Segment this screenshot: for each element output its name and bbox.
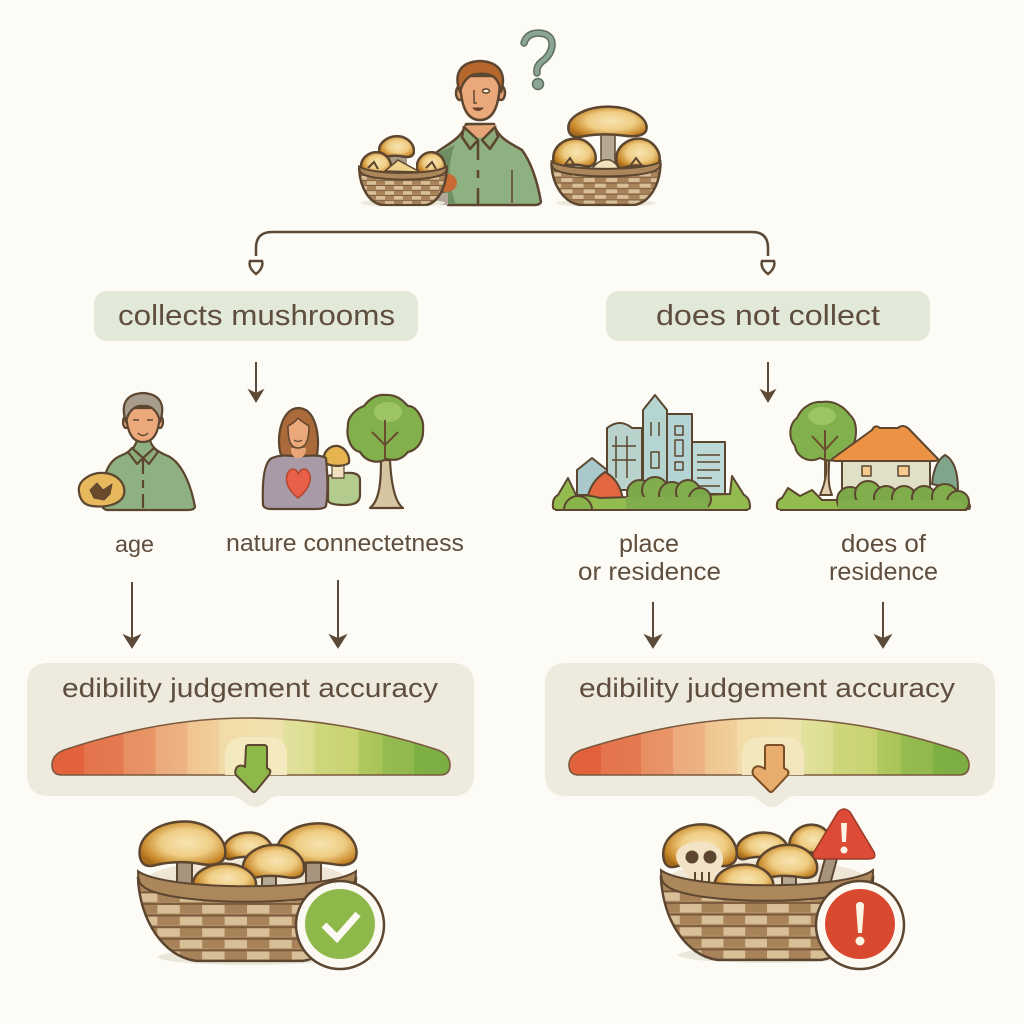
arrow: place of residence to accuracy [646, 602, 660, 647]
small basket of mushrooms [359, 136, 447, 207]
icon: city buildings [553, 395, 750, 524]
label: place or residence: or residence [578, 558, 721, 586]
large basket of mushrooms [552, 107, 660, 207]
gauge marker: green arrow [235, 745, 270, 792]
right branch node [762, 261, 774, 274]
label: does of residence: does of [841, 530, 926, 558]
bushes and ground [777, 481, 970, 513]
pill: does not collect: does not collect [656, 300, 880, 332]
branching connector [250, 232, 774, 274]
skull [676, 842, 723, 884]
pill: collects mushrooms: collects mushrooms [118, 300, 395, 332]
badge: red exclamation [816, 881, 904, 969]
left branch node [250, 261, 262, 274]
arrow: does not collect to factors [762, 362, 774, 401]
basket: edible mushrooms with check [138, 821, 384, 969]
gauge bar [52, 718, 450, 775]
icon: country house with tree [777, 402, 970, 513]
arrow: age to accuracy [125, 582, 139, 647]
warning triangle [813, 809, 875, 859]
panel: accuracy, non-collectors [545, 663, 995, 807]
pill: does not collect [606, 291, 930, 341]
label: does of residence [829, 530, 938, 586]
icon: older man holding mushroom [79, 393, 195, 510]
question mark [524, 33, 552, 90]
pill: collects mushrooms [94, 291, 418, 341]
heading: edibility judgement accuracy: edibility judgement accuracy [62, 673, 439, 703]
label: place or residence: place [619, 530, 679, 558]
label: nature connectetness: nature connectetness [226, 530, 464, 557]
arrow: does of residence to accuracy [876, 602, 890, 647]
gauge marker: orange arrow [752, 745, 788, 792]
top figure: person choosing between baskets [359, 33, 660, 207]
heading: edibility judgement accuracy: edibility judgement accuracy [579, 673, 956, 703]
gauge bar [569, 718, 969, 775]
bushes and ground [552, 475, 751, 510]
person [435, 61, 541, 205]
icon: woman with heart, mushroom and tree [263, 395, 423, 509]
badge: green check [296, 881, 384, 969]
arrow: collects to factors [250, 362, 262, 401]
basket: poisonous mushrooms with warning [661, 809, 904, 969]
arrow: nature connectedness to accuracy [331, 580, 345, 647]
panel: accuracy, collectors [27, 663, 474, 807]
label: does of residence: residence [829, 558, 938, 586]
label: age: age [115, 531, 154, 557]
label: place or residence [578, 530, 721, 586]
